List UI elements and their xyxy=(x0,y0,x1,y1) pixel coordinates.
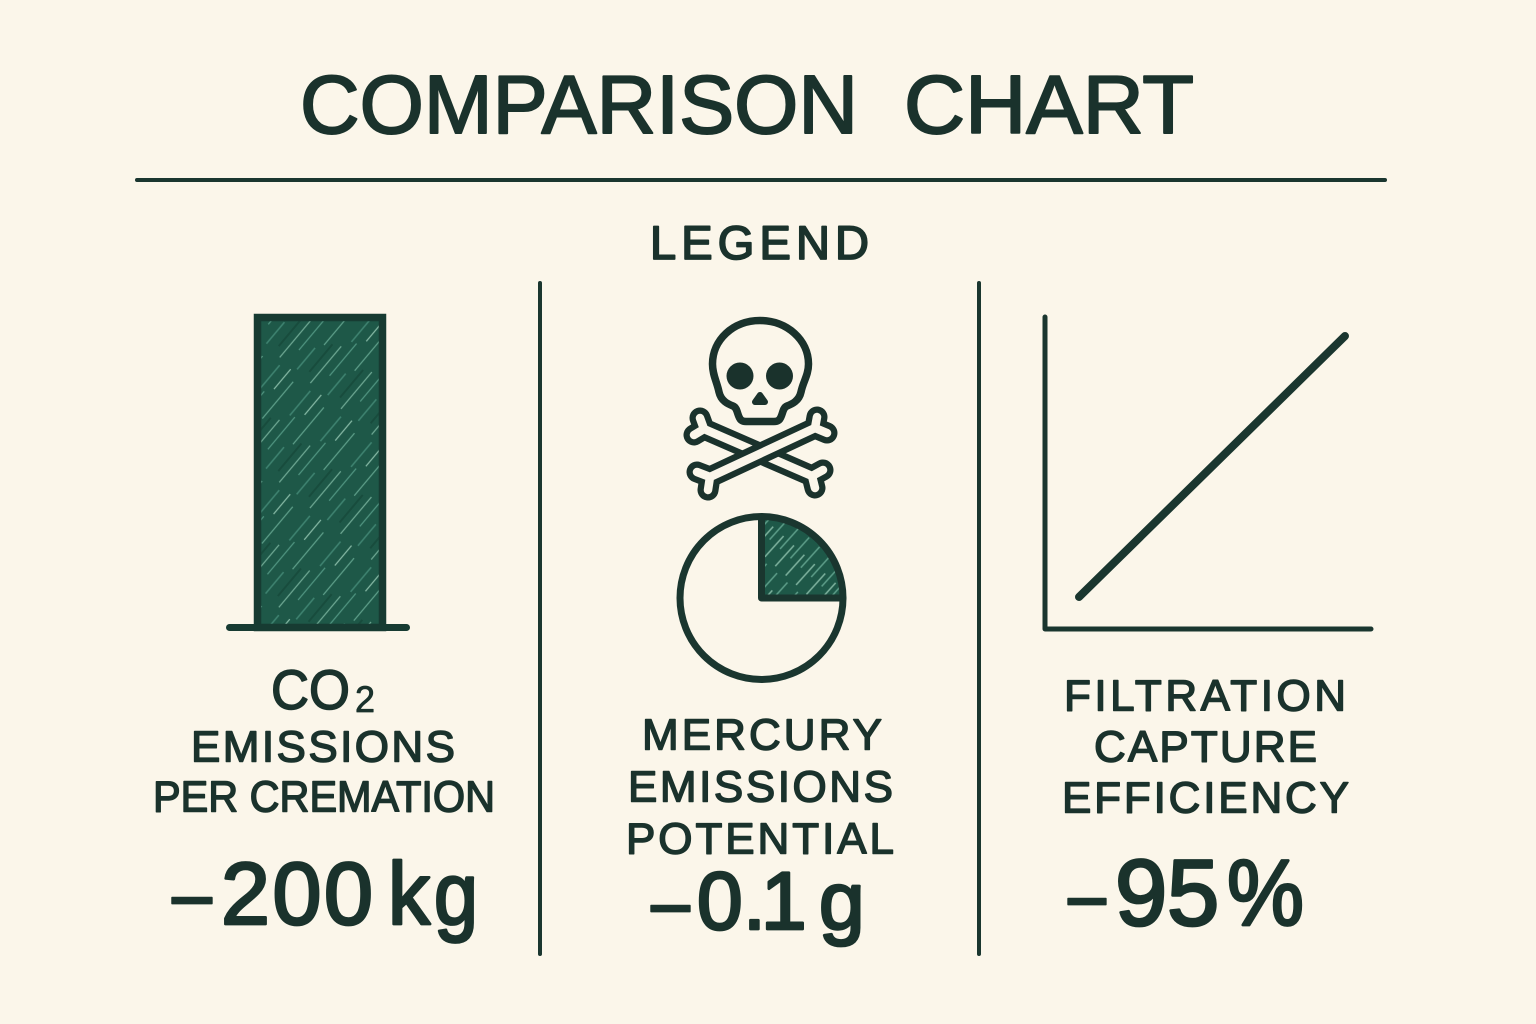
label: CO2 emissions per cremation: EMISSIONS xyxy=(191,722,455,772)
label: mercury emissions potential: EMISSIONS xyxy=(628,762,893,812)
label: CO2 emissions per cremation: CO xyxy=(271,658,350,721)
value: 0.1 g: 0 xyxy=(697,856,743,947)
label: CO2 emissions per cremation xyxy=(153,658,495,822)
label: mercury emissions potential xyxy=(626,710,894,864)
label: mercury emissions potential: MERCURY xyxy=(642,710,882,760)
icon: line chart xyxy=(1045,317,1371,629)
value: 0.1 g xyxy=(651,851,865,950)
icon: skull and crossbones xyxy=(694,320,827,490)
label: CO2 emissions per cremation: PER CREMATION xyxy=(153,772,495,822)
label: filtration capture efficiency: FILTRATION xyxy=(1064,672,1346,720)
title: COMPARISON xyxy=(300,58,858,151)
icon: pie chart xyxy=(680,516,843,680)
value: 200 kg: k xyxy=(388,844,431,943)
value: 200 kg: g xyxy=(434,844,478,943)
skull xyxy=(712,320,808,422)
title: CHART xyxy=(904,58,1194,151)
value: 95%: % xyxy=(1227,840,1304,945)
value: 0.1 g: 1 xyxy=(761,856,807,947)
value: 95%: 9 xyxy=(1115,840,1167,945)
label: filtration capture efficiency: EFFICIENCY xyxy=(1062,774,1349,822)
label: filtration capture efficiency xyxy=(1062,672,1349,822)
value: 0.1 g: . xyxy=(743,856,766,947)
icon: bar xyxy=(230,318,406,628)
legend heading: LEGEND xyxy=(650,216,869,269)
label: CO2 emissions per cremation: 2 xyxy=(355,679,375,720)
value: 95%: – xyxy=(1068,844,1106,943)
value: 0.1 g: – xyxy=(651,851,690,950)
panel: CO2 emissions xyxy=(153,318,495,943)
label: mercury emissions potential: POTENTIAL xyxy=(626,814,894,864)
crossbones xyxy=(694,417,827,490)
value: 200 kg xyxy=(172,843,478,943)
value: 95% xyxy=(1068,840,1304,945)
label: filtration capture efficiency: CAPTURE xyxy=(1094,722,1317,772)
value: 200 kg: – xyxy=(172,843,212,942)
panel: mercury emissions xyxy=(626,320,894,950)
panel: filtration capture xyxy=(1045,317,1371,945)
value: 95%: 5 xyxy=(1167,840,1219,945)
value: 200 kg: 200 xyxy=(221,844,373,943)
value: 0.1 g: g xyxy=(819,856,865,947)
title xyxy=(300,58,1194,151)
